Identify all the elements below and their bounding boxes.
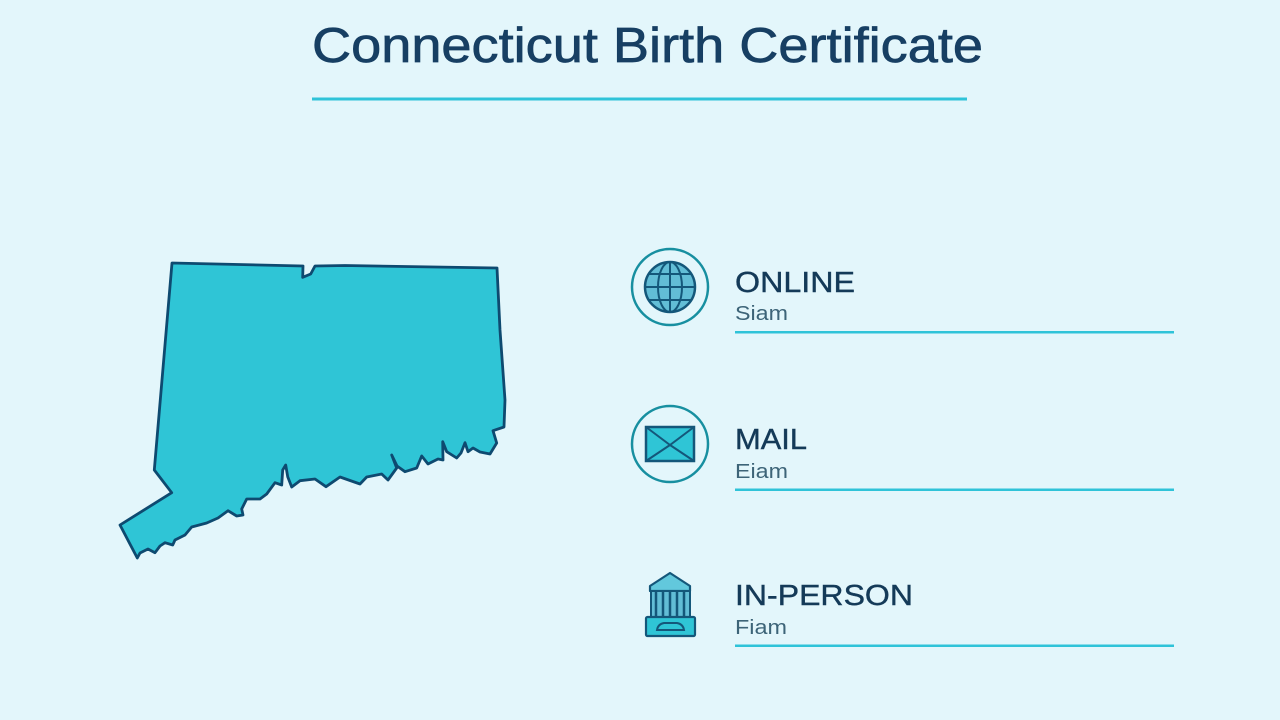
sublabel: in-person: Fiam bbox=[735, 617, 787, 639]
label: online: ONLINE bbox=[735, 267, 855, 299]
icon: envelope bbox=[632, 406, 708, 482]
map: Connecticut state shape bbox=[120, 263, 505, 558]
label: in-person: IN-PERSON bbox=[735, 580, 913, 612]
sublabel: mail: Eiam bbox=[735, 461, 788, 483]
row: mail bbox=[632, 406, 1174, 491]
sublabel: online: Siam bbox=[735, 303, 788, 325]
icon: courthouse bbox=[646, 573, 695, 636]
icon: globe bbox=[632, 249, 708, 325]
title: Connecticut Birth Certificate bbox=[312, 19, 983, 73]
label: mail: MAIL bbox=[735, 424, 807, 456]
divider: in-person bbox=[735, 644, 1174, 647]
title underline bbox=[312, 98, 967, 100]
row: online bbox=[632, 249, 1174, 334]
divider: mail bbox=[735, 488, 1174, 491]
row: in-person bbox=[646, 573, 1174, 647]
divider: online bbox=[735, 331, 1174, 334]
